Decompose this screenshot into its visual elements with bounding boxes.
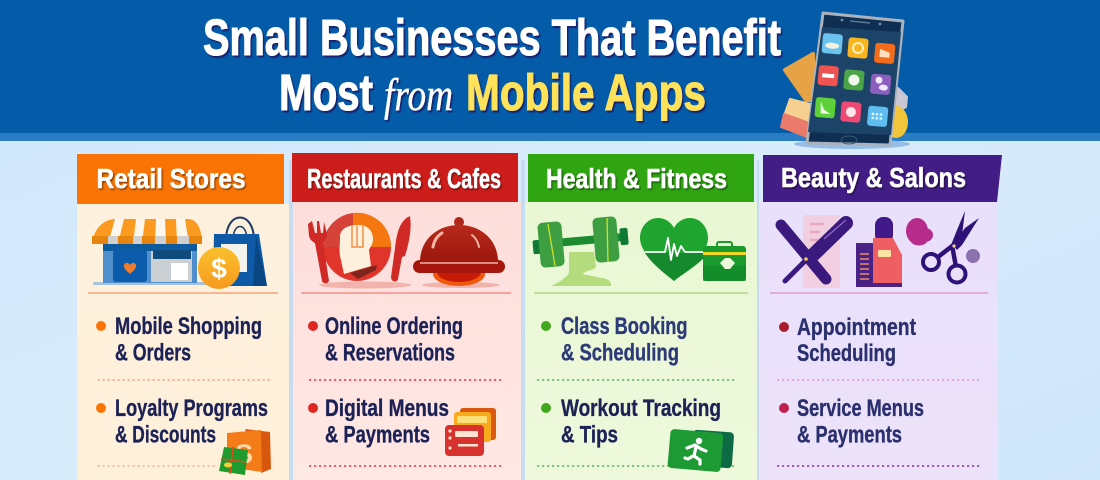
divider [88, 292, 278, 294]
icon: orange bag with green gift [219, 429, 271, 475]
bullet: mobile shopping and orders [96, 313, 262, 366]
icon: menu cards [445, 408, 496, 456]
bullet: digital menus and payments: & Payments [325, 422, 430, 448]
bullet: loyalty programs and discounts [96, 395, 268, 448]
bullet: mobile shopping and orders: Mobile Shopping [115, 313, 262, 340]
app tile row 3 [814, 97, 889, 127]
panel heading: retail stores: Retail Stores [96, 163, 246, 194]
bullet: online ordering and reservations: Online Ordering [325, 313, 463, 340]
bullet: appointment scheduling: Scheduling [797, 340, 896, 367]
panel heading: restaurants and cafes [292, 153, 518, 202]
bullet: appointment scheduling: Appointment [797, 314, 916, 341]
icon: orange bag with green gift: S [235, 439, 253, 469]
bullet: service menus and payments [779, 395, 924, 448]
bullet: digital menus and payments: Digital Menus [325, 395, 449, 422]
divider [534, 292, 748, 294]
bullet: workout tracking and tips: & Tips [561, 422, 618, 448]
panel: retail stores [77, 154, 293, 480]
title [203, 9, 781, 121]
icon: storefront [92, 219, 215, 285]
icon: comb and razor [781, 215, 846, 288]
app tile row 2 [817, 65, 892, 95]
title: Mobile Apps [466, 64, 706, 121]
icon: dumbbell [532, 216, 629, 286]
panel heading: retail stores [77, 154, 284, 204]
panel heading: beauty and salons [763, 155, 1002, 202]
bullet: digital menus and payments [308, 395, 449, 448]
icon: heart [906, 218, 933, 246]
title: Most [279, 64, 373, 121]
icon: shopping bag and coin: $ [211, 253, 227, 284]
icon: smartphone with app tiles [781, 13, 910, 149]
bullet: loyalty programs and discounts: Loyalty Programs [115, 395, 268, 422]
panel heading: health and fitness [528, 154, 754, 202]
icon: serving cloche [413, 217, 505, 288]
icon: cosmetic bottle [856, 217, 902, 287]
bullet: online ordering and reservations [308, 313, 463, 366]
bullet: service menus and payments: & Payments [797, 422, 902, 448]
bullet: online ordering and reservations: & Reservations [325, 340, 455, 366]
bullet: mobile shopping and orders: & Orders [115, 340, 191, 366]
bullet: class booking and scheduling: Class Booking [561, 313, 688, 340]
panel heading: restaurants and cafes: Restaurants & Cafes [307, 163, 501, 194]
panel: restaurants and cafes [292, 153, 525, 480]
bullet: appointment scheduling [779, 314, 916, 367]
divider [770, 292, 988, 294]
divider [301, 292, 511, 294]
bullet: loyalty programs and discounts: & Discounts [115, 422, 216, 448]
icon: shopping bag and coin [198, 218, 267, 289]
panel: health and fitness [525, 154, 759, 480]
bullet: class booking and scheduling: & Scheduling [561, 340, 679, 366]
app tile row 1 [821, 33, 896, 64]
bullet: workout tracking and tips [541, 395, 721, 448]
icon: runner card [667, 429, 734, 472]
title: Small Businesses That Benefit [203, 9, 781, 66]
panel heading: health and fitness: Health & Fitness [546, 163, 727, 194]
icon: first aid case [703, 242, 746, 281]
bullet: class booking and scheduling [541, 313, 688, 366]
title: from [384, 69, 453, 120]
bullet: workout tracking and tips: Workout Tracking [561, 395, 721, 422]
panel: beauty and salons [759, 155, 1002, 480]
header banner [0, 0, 1100, 141]
panel heading: beauty and salons: Beauty & Salons [781, 162, 966, 193]
icon: heart with pulse line [640, 218, 708, 281]
bullet: service menus and payments: Service Menus [797, 395, 924, 422]
icon: plate with fork, knife [308, 213, 411, 288]
icon: scissors [923, 211, 980, 282]
